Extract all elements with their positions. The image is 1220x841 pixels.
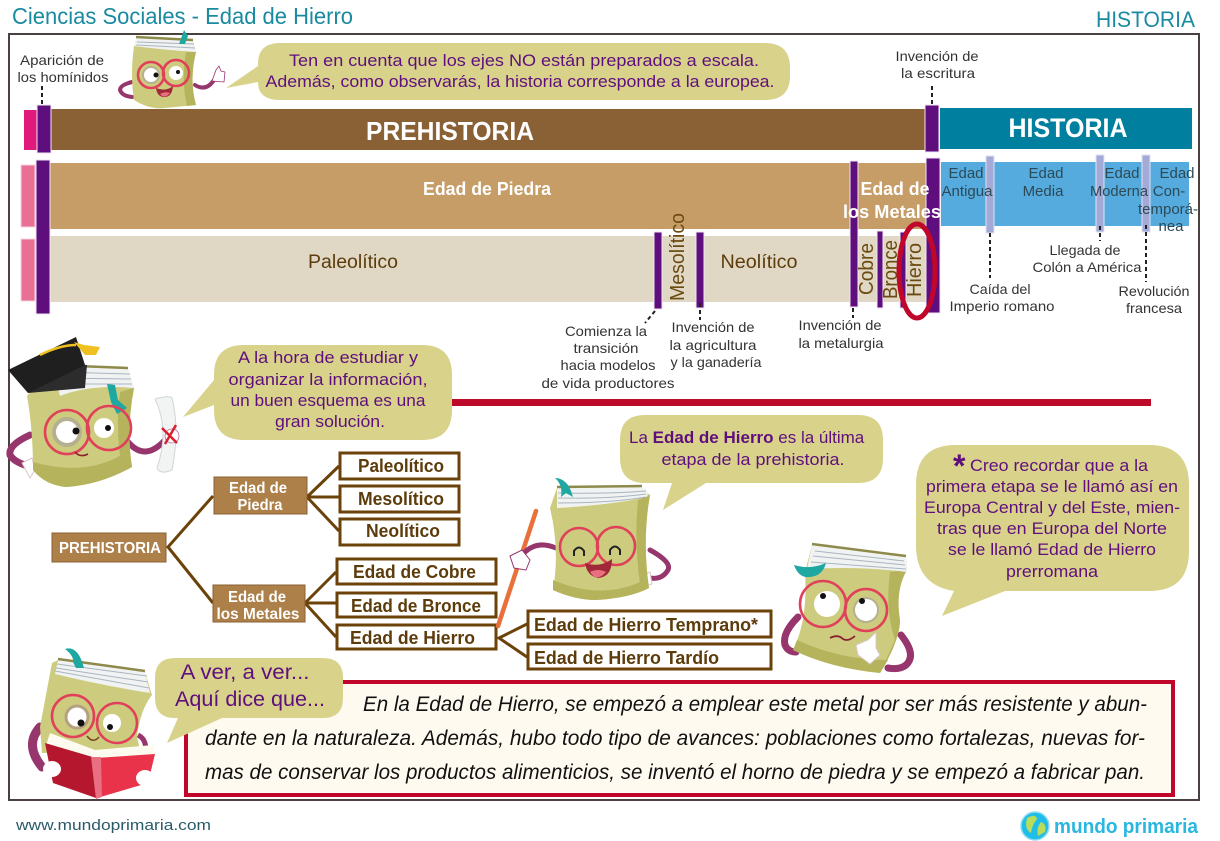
labels: edades históricas: Edad bbox=[948, 165, 984, 182]
callout: un buen esquema bbox=[183, 345, 452, 440]
text panel: edad de hierro bbox=[186, 682, 1173, 795]
event: invención de la escritura: Invención de bbox=[896, 48, 979, 64]
callout: un buen esquema: un buen esquema es una bbox=[230, 391, 426, 410]
node: edad de bronce: Edad de Bronce bbox=[351, 596, 481, 616]
divider bar bbox=[452, 399, 1151, 406]
label: edad de los metales: Edad de bbox=[860, 179, 930, 199]
section label: HISTORIA: HISTORIA bbox=[1096, 7, 1195, 32]
node: mesolítico: Mesolítico bbox=[358, 489, 444, 509]
callout: edad de hierro prerromana: Europa Central y del Este, mien- bbox=[924, 498, 1180, 517]
event: invención de la metalurgia bbox=[798, 308, 884, 351]
period markers bbox=[36, 105, 1150, 314]
band: historia: HISTORIA bbox=[1008, 113, 1128, 143]
callout: edad de hierro prerromana bbox=[916, 445, 1189, 616]
node: edad de los metales: Edad de bbox=[228, 589, 286, 606]
node: edad de hierro bbox=[337, 625, 496, 649]
node: prehistoria: PREHISTORIA bbox=[59, 540, 161, 557]
character: graduate book bbox=[8, 337, 179, 487]
band: prehistoria bbox=[24, 109, 926, 150]
character: reading book bbox=[32, 648, 155, 799]
callout: a ver, a ver bbox=[155, 658, 343, 743]
callout: última etapa de la prehistoria bbox=[620, 415, 883, 510]
node: edad de piedra: Piedra bbox=[238, 497, 283, 514]
timeline bbox=[21, 105, 1198, 318]
callout: un buen esquema: gran solución. bbox=[275, 412, 385, 431]
node: edad de hierro tardío: Edad de Hierro Tardío bbox=[534, 648, 719, 668]
event: invención de la agricultura: y la ganadería bbox=[670, 354, 762, 370]
node: edad de los metales: los Metales bbox=[216, 606, 300, 623]
text panel: edad de hierro: dante en la naturaleza. Además, hubo todo tipo de avances: poblaciones como fortalezas, nuevas for- bbox=[205, 727, 1145, 750]
band: historia bbox=[940, 108, 1192, 149]
node: edad de hierro temprano: Edad de Hierro Temprano* bbox=[534, 615, 758, 635]
event: llegada de colón a américa bbox=[1032, 226, 1142, 275]
callout: ejes no a escala: Ten en cuenta que los ejes NO están preparados a escala. bbox=[289, 51, 759, 70]
callout: edad de hierro prerromana: tras que en Europa del Norte bbox=[937, 519, 1167, 538]
labels: edades históricas: nea bbox=[1158, 218, 1184, 235]
event: transición a modelos productores: Comienza la bbox=[565, 323, 647, 339]
highlight ellipse: Hierro bbox=[899, 224, 935, 318]
labels: edades históricas: Antigua bbox=[942, 183, 993, 200]
labels: edades históricas: Edad bbox=[1159, 165, 1195, 182]
labels: edades históricas: Edad bbox=[1104, 165, 1140, 182]
node: edad de cobre: Edad de Cobre bbox=[353, 562, 476, 582]
labels: edades históricas: Edad bbox=[1028, 165, 1064, 182]
event: aparición de los homínidos: los homínidos bbox=[18, 69, 108, 85]
event: transición a modelos productores: transición bbox=[574, 340, 638, 356]
node: edad de los metales bbox=[213, 585, 305, 623]
footer logo bbox=[1021, 812, 1199, 840]
callout: edad de hierro prerromana: Creo recordar que a la bbox=[970, 456, 1149, 475]
event: invención de la escritura: la escritura bbox=[901, 65, 975, 81]
text panel: edad de hierro: mas de conservar los productos alimenticios, se inventó el horno de piedra y se empezó a fabricar pan. bbox=[205, 761, 1145, 784]
callout: un buen esquema: organizar la información, bbox=[228, 370, 428, 389]
character: book with thumbs up bbox=[120, 30, 225, 108]
band: paleolítico, mesolítico, neolítico bbox=[21, 236, 926, 302]
callout: edad de hierro prerromana: prerromana bbox=[1006, 562, 1099, 581]
callout: última etapa de la prehistoria: La Edad de Hierro es la última bbox=[629, 428, 865, 447]
node: edad de piedra bbox=[214, 477, 307, 514]
label: edad de los metales bbox=[843, 179, 941, 222]
vertical label: Bronce: Bronce bbox=[880, 240, 902, 299]
event: invención de la metalurgia: la metalurgia bbox=[798, 335, 884, 351]
event: caída del imperio romano bbox=[950, 233, 1055, 314]
callout: ejes no a escala: Además, como observarás, la historia corresponde a la europea. bbox=[266, 72, 774, 91]
node: edad de piedra: Edad de bbox=[229, 480, 287, 497]
event: aparición de los homínidos: Aparición de bbox=[20, 52, 104, 68]
vertical label: Mesolítico: Mesolítico bbox=[667, 213, 689, 301]
labels: edades históricas bbox=[942, 165, 1198, 235]
event: transición a modelos productores bbox=[542, 311, 674, 391]
concept tree bbox=[52, 453, 771, 669]
event: revolución francesa: Revolución bbox=[1118, 283, 1190, 299]
character: thinking book bbox=[785, 544, 910, 673]
text panel: edad de hierro: En la Edad de Hierro, se empezó a emplear este metal por ser más resistente y abun- bbox=[363, 693, 1147, 716]
character: book with pointer bbox=[498, 478, 669, 626]
event: llegada de colón a américa: Llegada de bbox=[1050, 242, 1121, 258]
node: edad de hierro tardío bbox=[528, 644, 771, 669]
event: aparición de los homínidos bbox=[18, 52, 108, 105]
band: paleolítico, mesolítico, neolítico: Paleolítico bbox=[308, 252, 398, 273]
callout: ejes no a escala bbox=[226, 43, 790, 100]
band: paleolítico, mesolítico, neolítico: Neolítico bbox=[720, 252, 798, 273]
page title: Ciencias Sociales - Edad de Hierro bbox=[12, 3, 353, 29]
event: invención de la agricultura bbox=[670, 303, 762, 370]
node: paleolítico bbox=[340, 453, 459, 479]
callout: a ver, a ver: A ver, a ver... bbox=[180, 661, 310, 684]
labels: edades históricas: temporá- bbox=[1138, 201, 1198, 218]
node: edad de hierro: Edad de Hierro bbox=[350, 628, 475, 648]
node: prehistoria bbox=[52, 533, 166, 562]
callout: edad de hierro prerromana: * bbox=[953, 448, 966, 484]
node: paleolítico: Paleolítico bbox=[358, 456, 444, 476]
band: edad de piedra y metales: Edad de Piedra bbox=[423, 179, 552, 199]
callout: última etapa de la prehistoria: etapa de la prehistoria. bbox=[662, 450, 844, 469]
callout: edad de hierro prerromana: se le llamó Edad de Hierro bbox=[948, 540, 1156, 559]
event: caída del imperio romano: Caída del bbox=[970, 281, 1030, 297]
event: transición a modelos productores: de vida productores bbox=[542, 375, 674, 391]
band: prehistoria: PREHISTORIA bbox=[366, 116, 534, 146]
tree connectors bbox=[168, 466, 527, 657]
event: llegada de colón a américa: Colón a América bbox=[1032, 259, 1142, 275]
event: revolución francesa bbox=[1118, 225, 1190, 316]
vertical label: Cobre: Cobre bbox=[856, 243, 878, 295]
event: caída del imperio romano: Imperio romano bbox=[950, 298, 1055, 314]
node: neolítico: Neolítico bbox=[366, 521, 440, 541]
band: edades históricas background bbox=[941, 162, 1189, 226]
labels: edades históricas: Media bbox=[1023, 183, 1064, 200]
event: invención de la metalurgia: Invención de bbox=[798, 317, 882, 333]
node: mesolítico bbox=[340, 486, 459, 512]
event: invención de la agricultura: la agricultura bbox=[670, 337, 757, 353]
vertical label: Hierro: Hierro bbox=[904, 243, 926, 297]
labels: edades históricas: Con- bbox=[1153, 183, 1185, 200]
event: invención de la escritura bbox=[896, 48, 979, 105]
event: revolución francesa: francesa bbox=[1126, 300, 1182, 316]
label: edad de los metales: los Metales bbox=[843, 202, 941, 222]
event: transición a modelos productores: hacia modelos bbox=[560, 357, 656, 373]
node: neolítico bbox=[340, 519, 459, 545]
callout: a ver, a ver: Aquí dice que... bbox=[175, 688, 325, 711]
callout: edad de hierro prerromana: primera etapa se le llamó así en bbox=[926, 477, 1178, 496]
labels: edades históricas: Moderna bbox=[1090, 183, 1149, 200]
callout: un buen esquema: A la hora de estudiar y bbox=[238, 348, 419, 367]
band: edad de piedra y metales bbox=[21, 163, 926, 229]
footer logo: mundo primaria bbox=[1054, 816, 1199, 838]
footer url: www.mundoprimaria.com bbox=[15, 817, 211, 834]
event: invención de la agricultura: Invención de bbox=[672, 319, 755, 335]
node: edad de cobre bbox=[337, 559, 496, 584]
